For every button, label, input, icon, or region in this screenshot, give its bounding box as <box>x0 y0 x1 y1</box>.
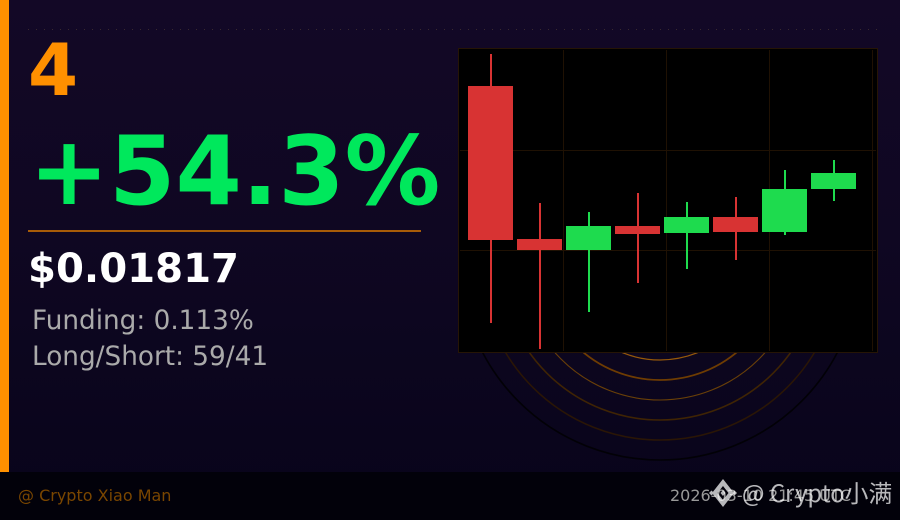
concentric rings <box>460 60 860 460</box>
footer timestamp: 2026-03-10 21:45 UTC <box>670 486 851 505</box>
candle 2 <box>517 203 562 349</box>
footer handle: @ Crypto Xiao Man <box>18 486 171 505</box>
candle 8 <box>811 160 856 201</box>
percent change: +54.3% <box>29 115 440 227</box>
rank number: 4 <box>28 28 78 112</box>
candle 7 <box>762 170 807 235</box>
footer <box>0 472 900 520</box>
candle 1 <box>468 54 513 323</box>
candle 6 <box>713 197 758 260</box>
candle 5 <box>664 202 709 269</box>
funding rate: Funding: 0.113% <box>32 306 254 336</box>
price: $0.01817 <box>28 246 239 292</box>
left accent bar <box>0 0 9 472</box>
icon: exchange logo <box>709 479 737 507</box>
long short ratio: Long/Short: 59/41 <box>32 342 268 372</box>
candlestick chart <box>458 48 878 353</box>
candle 4 <box>615 193 660 283</box>
divider <box>28 230 421 232</box>
watermark text: @ Crypto小满 <box>742 474 892 509</box>
watermark <box>709 474 892 509</box>
candle 3 <box>566 212 611 312</box>
